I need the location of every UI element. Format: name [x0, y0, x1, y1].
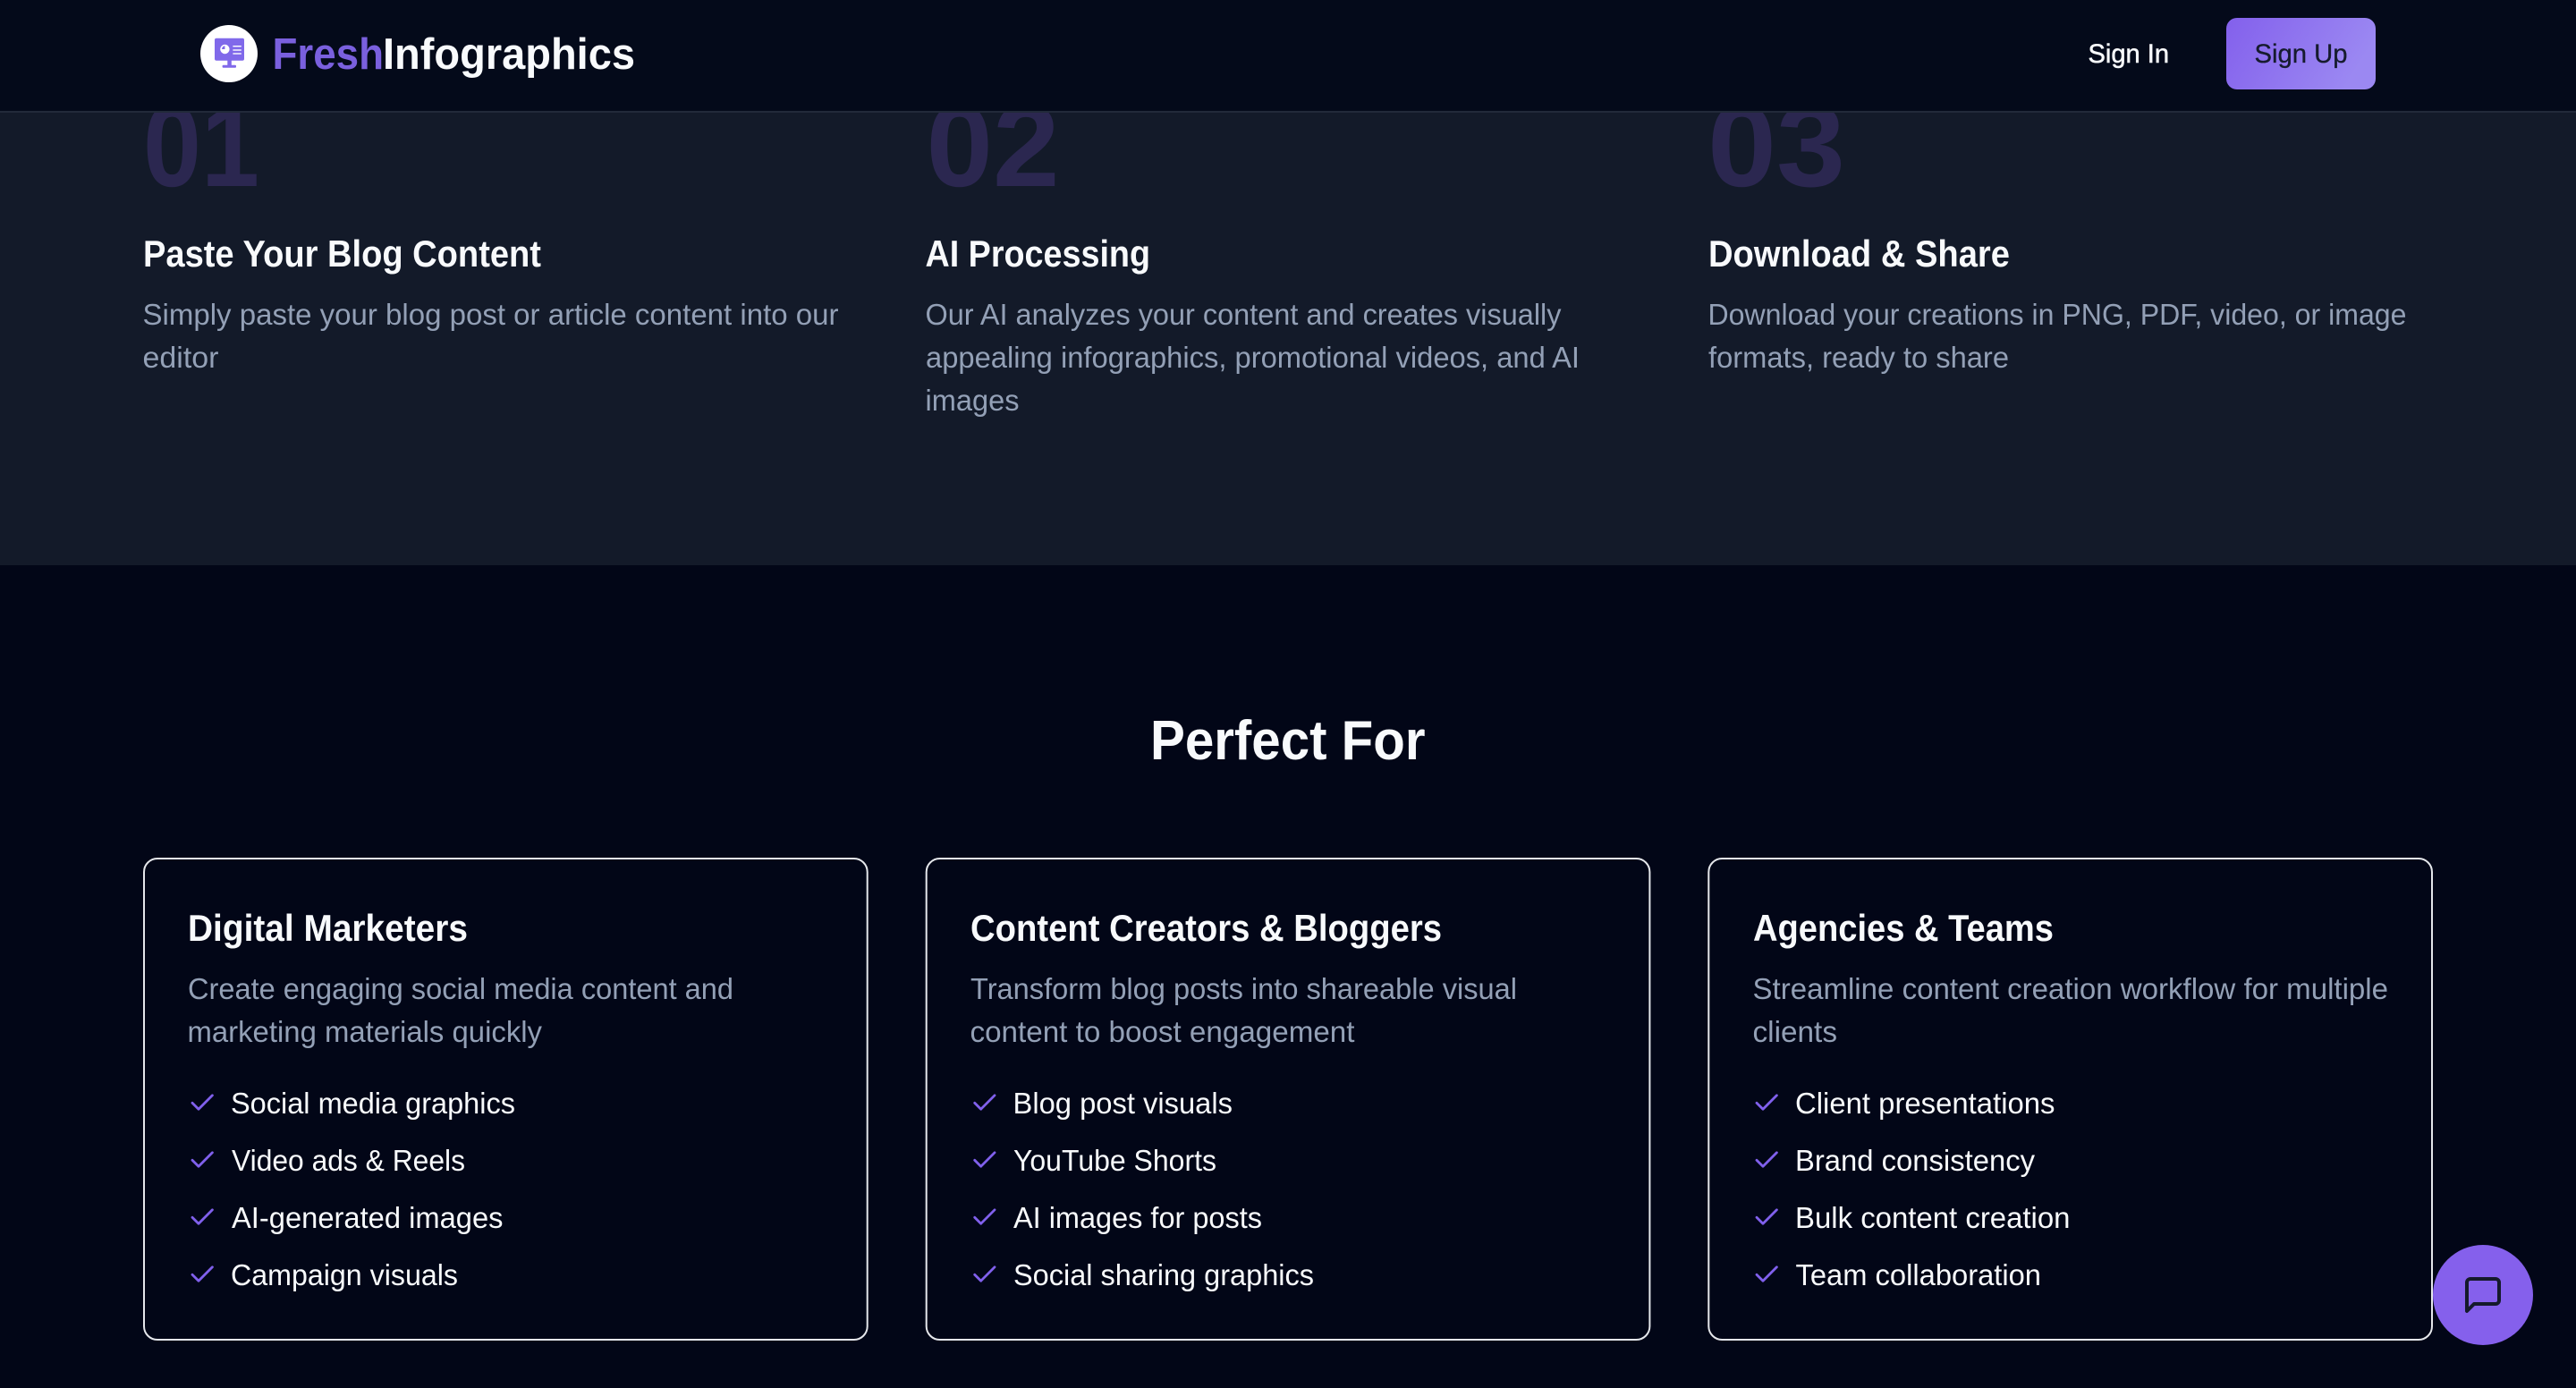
feature list [1013, 1088, 1314, 1292]
icon: logo presentation monitor [200, 25, 258, 82]
chat button [2433, 1245, 2533, 1345]
feature list: Social sharing graphics [1013, 1259, 1314, 1292]
icon: message square [2467, 1279, 2499, 1311]
step 2: Our AI analyzes your content and creates visually [925, 299, 1562, 332]
step 1: Paste Your Blog Content [143, 233, 541, 275]
step 3: Download & Share [1708, 233, 2010, 275]
step 3 [1707, 80, 2406, 375]
header bar [0, 0, 2576, 113]
card: Agencies & Teams: clients [1753, 1016, 1837, 1049]
step 1: Simply paste your blog post or article content into our [143, 299, 839, 332]
card: Digital Marketers: marketing materials quickly [188, 1016, 542, 1049]
feature list: Team collaboration [1796, 1259, 2041, 1292]
feature list: Video ads & Reels [232, 1145, 465, 1178]
heading: Perfect For: Perfect For [1150, 709, 1426, 772]
feature list: Bulk content creation [1795, 1202, 2070, 1235]
step 3: Download your creations in PNG, PDF, video, or image [1708, 299, 2406, 332]
step 1: editor [143, 342, 218, 375]
feature list: Social media graphics [231, 1088, 515, 1121]
step 2: appealing infographics, promotional videos, and AI [926, 342, 1580, 375]
feature list: YouTube Shorts [1013, 1145, 1216, 1178]
card: Digital Marketers: Digital Marketers [188, 907, 468, 949]
card: Agencies & Teams: Agencies & Teams [1753, 907, 2054, 949]
button: sign up: Sign Up [2254, 39, 2347, 69]
feature list: AI-generated images [232, 1202, 503, 1235]
card: Digital Marketers: Create engaging social media content and [188, 973, 733, 1006]
icon: checks [975, 1096, 995, 1281]
logo wordmark [272, 30, 635, 79]
step 2 [925, 80, 1580, 418]
card: Content Creators & Bloggers: Content Creators & Bloggers [970, 907, 1442, 949]
card: Content Creators & Bloggers: Transform blog posts into shareable visual [970, 973, 1517, 1006]
card: Agencies & Teams: Streamline content creation workflow for multiple [1753, 973, 2388, 1006]
feature list: Client presentations [1795, 1088, 2055, 1121]
panel: how it works steps [0, 80, 2576, 565]
feature list: Campaign visuals [231, 1259, 458, 1292]
feature list: Blog post visuals [1013, 1088, 1233, 1121]
feature list [1795, 1088, 2070, 1292]
step 1: 01 [143, 80, 259, 211]
step 3: formats, ready to share [1708, 342, 2009, 375]
card: Digital Marketers [144, 859, 868, 1340]
logo wordmark: Infographics [383, 30, 635, 79]
step 1 [143, 80, 839, 375]
feature list [231, 1088, 515, 1292]
logo wordmark: Fresh [272, 30, 384, 79]
step 2: AI Processing [925, 233, 1150, 275]
feature list: AI images for posts [1013, 1202, 1262, 1235]
card: Agencies & Teams [1708, 859, 2432, 1340]
icon: checks [1757, 1096, 1776, 1281]
card: Content Creators & Bloggers: content to boost engagement [970, 1016, 1355, 1049]
feature list: Brand consistency [1795, 1145, 2035, 1178]
icon: checks [192, 1096, 212, 1281]
step 2: images [925, 385, 1020, 418]
link: sign in: Sign In [2088, 39, 2169, 69]
card: Content Creators & Bloggers [927, 859, 1649, 1340]
step 2: 02 [927, 80, 1059, 211]
step 3: 03 [1707, 80, 1845, 211]
button: sign up [2226, 18, 2376, 89]
